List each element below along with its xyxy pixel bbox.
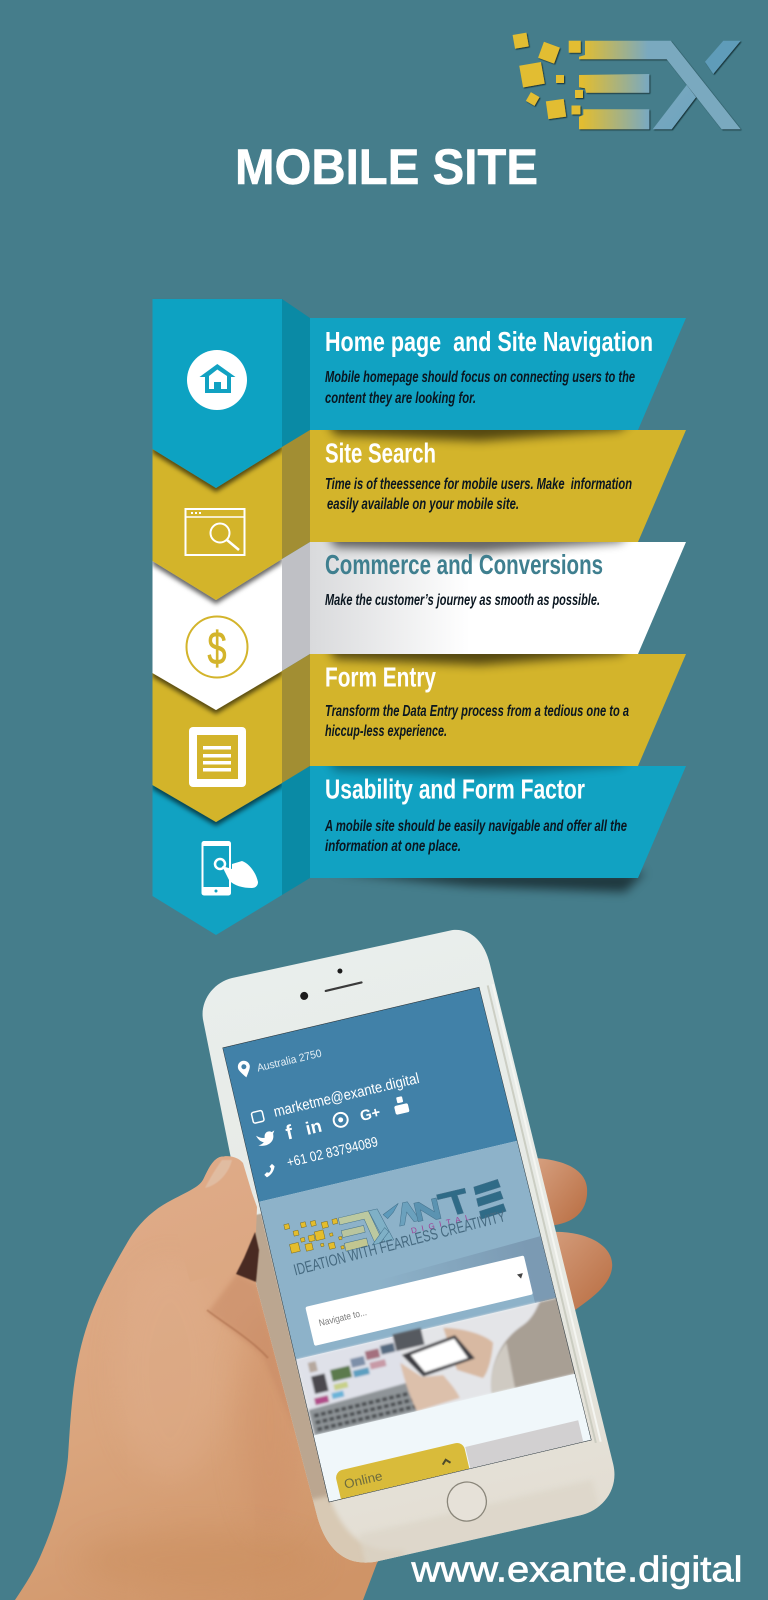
heading: usability: Usability and Form Factor <box>325 774 585 804</box>
pin icon <box>238 1060 250 1078</box>
icon: twitter <box>256 1130 274 1146</box>
envelope icon <box>251 1110 264 1123</box>
photo: hand holding phone <box>15 918 625 1600</box>
address: Australia 2750 <box>256 1048 323 1075</box>
body: form entry: hiccup-less experience. <box>325 723 447 740</box>
sensor <box>337 968 343 974</box>
finger one <box>535 1158 587 1226</box>
body: commerce: Make the customer’s journey as smooth as possible. <box>325 592 600 609</box>
panel: form entry <box>310 654 686 766</box>
heading: form entry: Form Entry <box>325 662 436 692</box>
icon: dollar coin <box>186 616 248 678</box>
earpiece <box>324 981 363 992</box>
select box <box>305 1255 533 1346</box>
palm <box>15 1156 420 1600</box>
icon: facebook: f <box>284 1121 295 1144</box>
screen: online chat tab: Online <box>343 1468 384 1492</box>
shadow under thumb <box>236 1232 259 1282</box>
icon: google plus: G+ <box>358 1104 382 1125</box>
body: form entry: Transform the Data Entry process from a tedious one to a <box>325 703 629 720</box>
panel: usability and form factor <box>310 752 686 892</box>
icon: touch phone <box>202 841 258 896</box>
body: usability: A mobile site should be easily navigable and offer all the <box>324 818 627 835</box>
icon: form document <box>189 727 246 787</box>
screen: logo band <box>257 1140 559 1360</box>
body: form entry <box>325 703 629 740</box>
email: marketme@exante.digital <box>272 1070 421 1121</box>
heading: home page: Home page and Site Navigation <box>325 326 653 357</box>
screen: hero photo <box>294 1296 575 1436</box>
body: home page: content they are looking for. <box>325 390 476 407</box>
screen: grey card <box>465 1420 584 1470</box>
heading: commerce: Commerce and Conversions <box>325 549 603 580</box>
website url: www.exante.digital <box>410 1548 742 1590</box>
screen: lower white area <box>313 1373 593 1504</box>
title: MOBILE SITE <box>235 139 538 195</box>
mini logo squares <box>284 1218 345 1254</box>
icon: pinterest <box>332 1111 349 1128</box>
body: usability: information at one place. <box>325 838 461 855</box>
phone screen <box>221 986 594 1506</box>
icon: home <box>187 350 247 410</box>
icon: phone handset <box>264 1164 275 1178</box>
thumb over phone edge <box>170 1156 257 1282</box>
home button <box>443 1478 490 1525</box>
screen: online chat tab <box>336 1443 470 1499</box>
screen: contact header <box>221 986 522 1202</box>
ribbon column: side folds and chevrons <box>152 299 310 935</box>
camera <box>299 991 309 1001</box>
body: site search <box>325 476 632 513</box>
palm shading <box>106 1275 294 1568</box>
body: site search: Time is of theessence for mobile users. Make information <box>325 476 632 493</box>
panel: commerce and conversions <box>310 542 686 654</box>
thumb highlight <box>205 1160 232 1188</box>
mini logo sub-brand: DIGITAL <box>410 1213 471 1236</box>
mini logo tagline: IDEATION WITH FEARLESS CREATIVITY <box>292 1208 508 1279</box>
icon: youtube <box>394 1096 410 1115</box>
phone number: +61 02 83794089 <box>285 1133 380 1170</box>
select box: Navigate to... <box>318 1307 368 1329</box>
body: usability <box>324 818 627 855</box>
mini logo wordmark <box>338 1179 507 1251</box>
heading: site search: Site Search <box>325 438 436 468</box>
icon: dollar coin: $ <box>208 622 226 674</box>
icon: search window <box>185 509 245 555</box>
logo: EX mark <box>513 33 741 129</box>
body: site search: easily available on your mobile site. <box>327 496 519 513</box>
body: home page <box>325 369 635 407</box>
phone body <box>202 930 614 1563</box>
finger two <box>540 1232 612 1312</box>
panel: home page and site navigation <box>310 318 686 430</box>
body: home page: Mobile homepage should focus on connecting users to the <box>325 369 635 386</box>
panel: site search <box>310 430 686 542</box>
icon: linkedin: in <box>304 1116 324 1139</box>
